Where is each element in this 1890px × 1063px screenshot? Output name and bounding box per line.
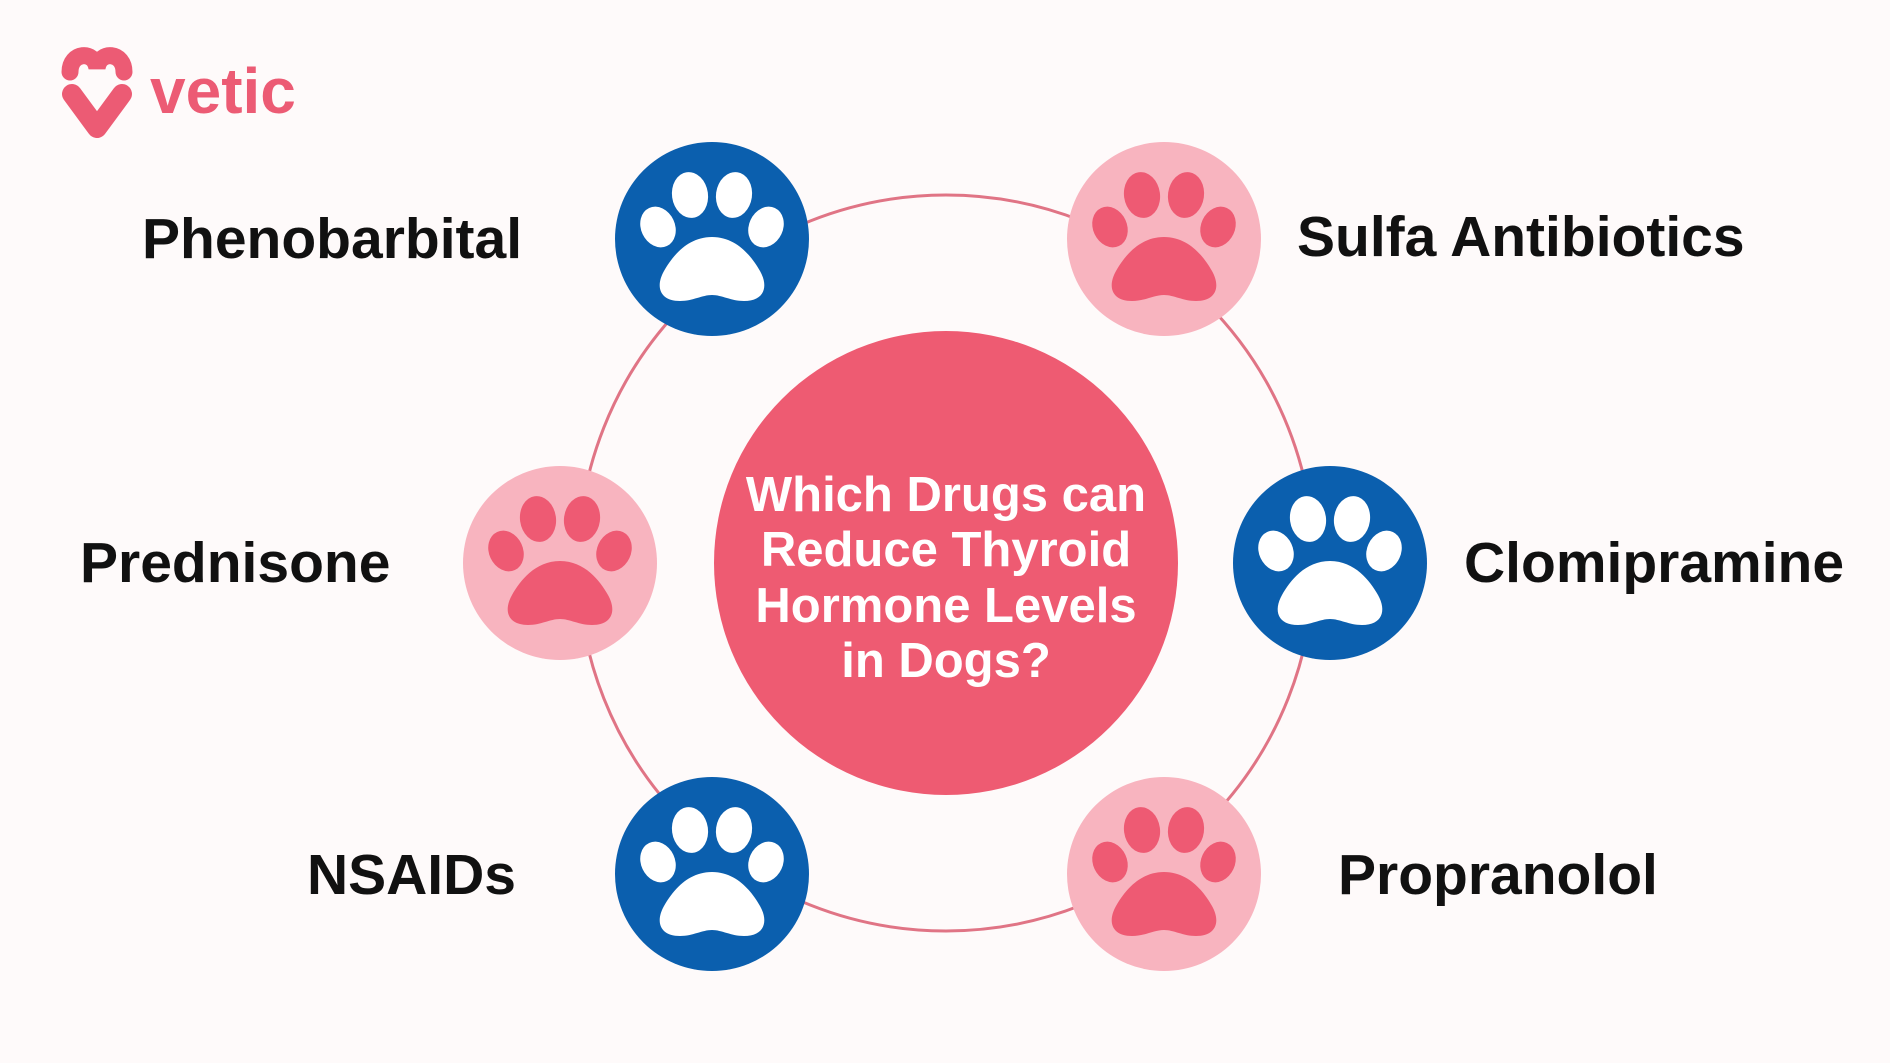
paw: Clomipramine (1233, 466, 1427, 660)
paw: Phenobarbital (615, 142, 809, 336)
label: Propranolol: Propranolol (1338, 843, 1658, 907)
label: Prednisone: Prednisone (80, 531, 390, 595)
label: Phenobarbital: Phenobarbital (142, 207, 522, 271)
center circle: Which Drugs can (746, 468, 1146, 522)
center circle: Reduce Thyroid (761, 523, 1131, 577)
logo: vetic (150, 55, 296, 127)
paw: NSAIDs (615, 777, 809, 971)
ring (578, 195, 1314, 931)
label: Sulfa Antibiotics: Sulfa Antibiotics (1297, 205, 1745, 269)
center circle: in Dogs? (841, 634, 1051, 688)
paw: Prednisone (463, 466, 657, 660)
label: NSAIDs: NSAIDs (307, 843, 516, 907)
logo (70, 55, 296, 128)
center circle (714, 331, 1178, 795)
center circle: Hormone Levels (755, 579, 1137, 633)
paw: Propranolol (1067, 777, 1261, 971)
label: Clomipramine: Clomipramine (1464, 531, 1844, 595)
paw: Sulfa (1067, 142, 1261, 336)
